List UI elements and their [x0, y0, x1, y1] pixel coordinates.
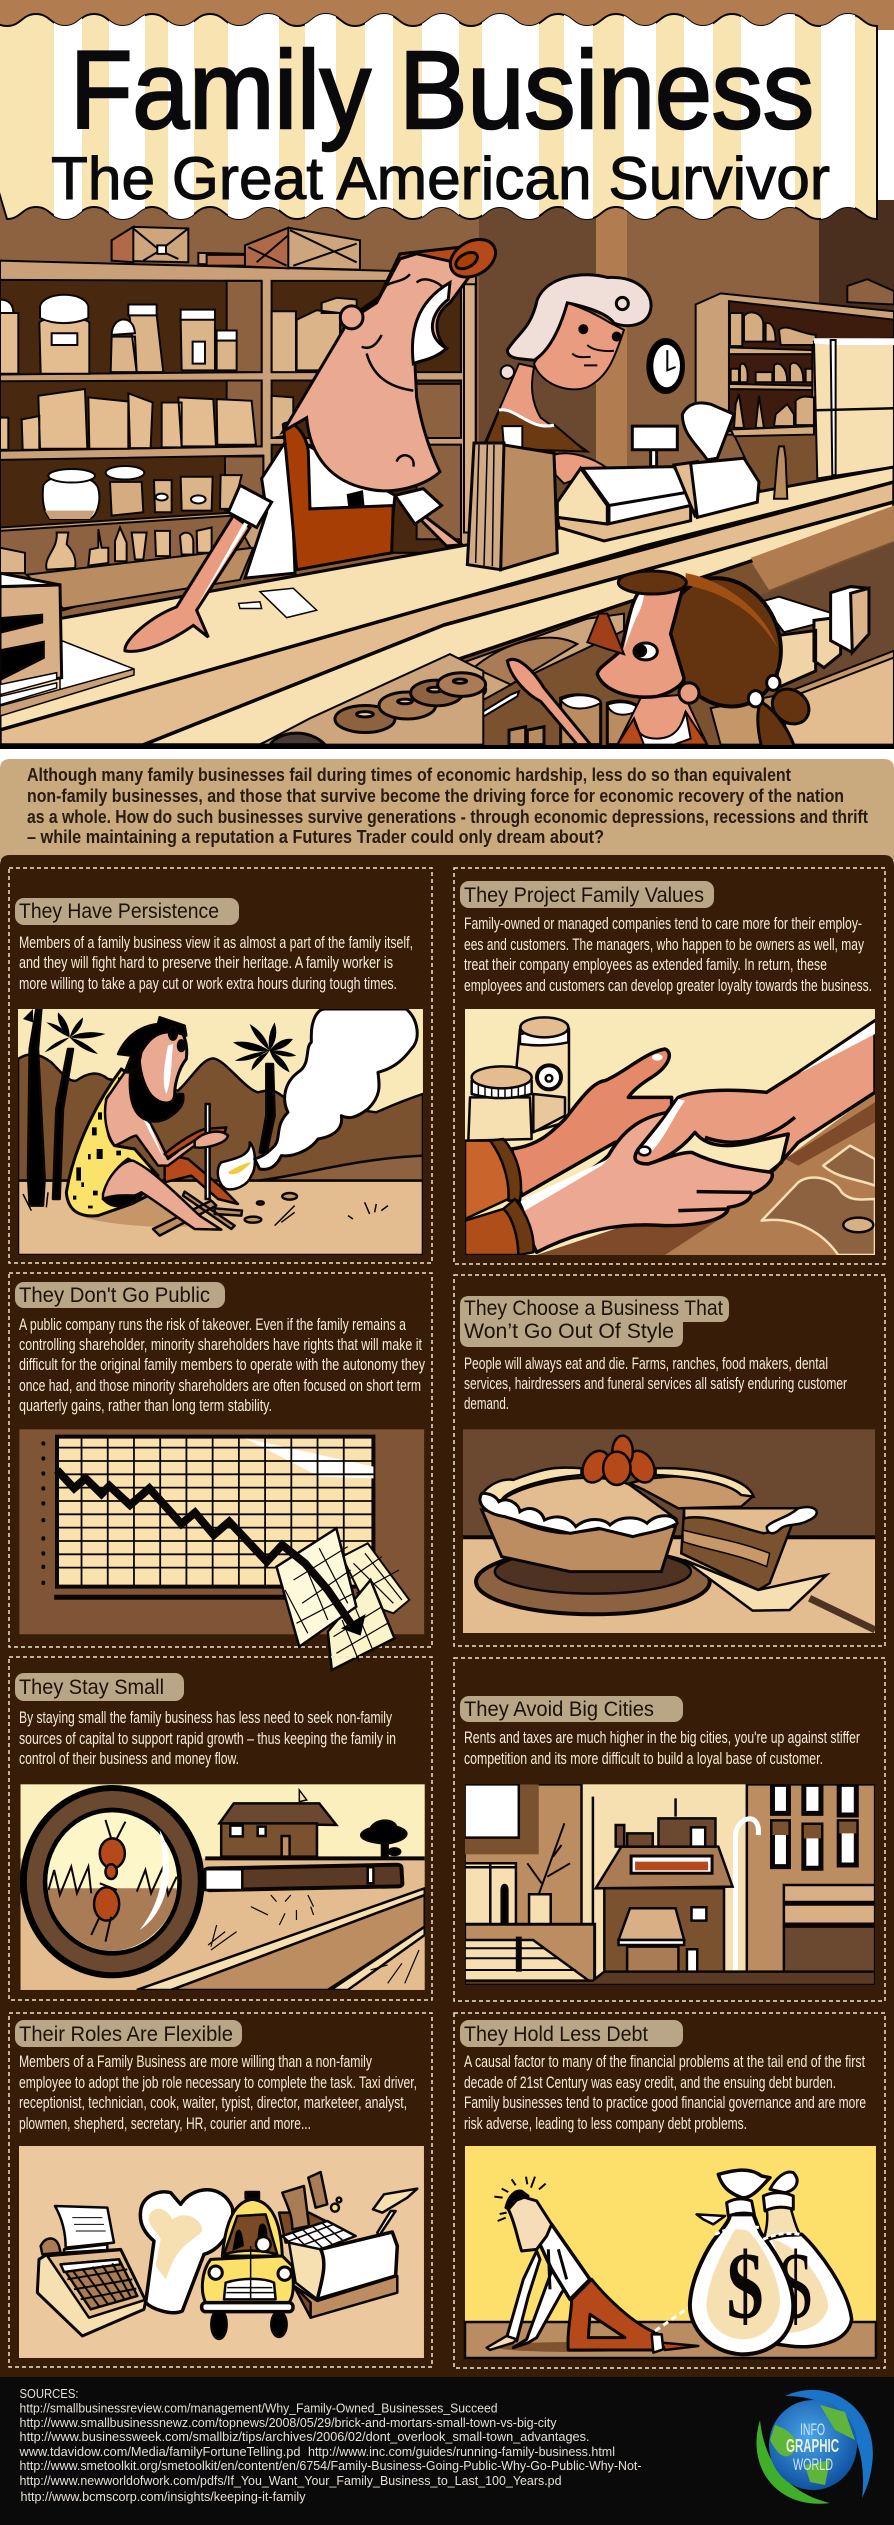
- sources footer: SOURCES:: [20, 2386, 78, 2401]
- illustration: ant under magnifying glass: [20, 1784, 425, 1990]
- sources footer: http://www.businessweek.com/smallbiz/tips/archives/2006/02/dont_overlook_small-town_advantages.: [20, 2429, 590, 2444]
- body text: more willing to take a pay cut or work extra hours during tough times.: [19, 974, 397, 993]
- heading: Their Roles Are Flexible: [19, 2023, 233, 2046]
- heading: They Don't Go Public: [19, 1284, 210, 1307]
- sources footer: www.tdavidow.com/Media/familyFortuneTelling.pd: [19, 2444, 300, 2459]
- illustration: man chained to money bags: [465, 2146, 876, 2358]
- sources footer: http://www.newworldofwork.com/pdfs/If_You_Want_Your_Family_Business_to_Last_100_Years.pd: [20, 2473, 562, 2488]
- body text: [19, 1315, 425, 1415]
- heading: They Stay Small: [19, 1676, 164, 1699]
- body text: [464, 2052, 866, 2133]
- logo: Info Graphic World globe: WORLD: [793, 2455, 833, 2474]
- dark content background: [0, 855, 894, 2377]
- body text: [464, 1354, 847, 1413]
- body text: and they will fight hard to preserve their heritage. A family worker is: [19, 953, 393, 972]
- illustration: cake: [463, 1429, 875, 1635]
- illustration: man chained to money bags: $: [727, 2234, 764, 2339]
- left shelving with jars and boxes: [0, 227, 476, 610]
- logo: Info Graphic World globe: GRAPHIC: [786, 2436, 839, 2456]
- body text: [19, 2052, 417, 2133]
- scene bottom border: [0, 745, 894, 749]
- body text: Members of a Family Business are more willing than a non-family: [19, 2052, 372, 2071]
- body text: sources of capital to support rapid growth – thus keeping the family in: [19, 1729, 396, 1748]
- heading: [460, 1296, 729, 1347]
- body text: controlling shareholder, minority shareholders have rights that will make it: [19, 1335, 422, 1354]
- heading: They Choose a Business That: [464, 1297, 723, 1320]
- sources footer: http://www.smallbusinessnewz.com/topnews/2008/05/29/brick-and-mortars-small-town-vs-big-city: [20, 2415, 557, 2430]
- sources footer: http://www.bcmscorp.com/insights/keeping-it-family: [20, 2489, 306, 2504]
- intro panel: Although many family businesses fail during times of economic hardship, less do so than equivalent: [27, 764, 791, 785]
- body text: Members of a family business view it as almost a part of the family itself,: [19, 933, 413, 952]
- heading: They Have Persistence: [19, 900, 219, 923]
- body text: receptionist, technician, cook, waiter, typist, director, marketeer, analyst,: [19, 2093, 407, 2112]
- panel: They Don't Go Public: [9, 1273, 432, 1670]
- illustration: caveman making fire: [18, 1009, 423, 1255]
- right cabinet, clock, woman, cash registers: [464, 275, 894, 533]
- sources footer: http://www.smetoolkit.org/smetoolkit/en/content/en/6754/Family-Business-Going-Public-Why-Go-Public-Why-Not-: [20, 2458, 642, 2473]
- panel: They Stay Small: [9, 1657, 432, 2000]
- title: Family Business: [70, 29, 814, 152]
- heading: They Project Family Values: [464, 884, 704, 907]
- body text: [19, 1708, 396, 1768]
- body text: control of their business and money flow.: [19, 1749, 239, 1768]
- panel: They Project Family Values: [454, 868, 885, 1264]
- body text: [464, 914, 872, 995]
- intro panel: – while maintaining a reputation a Futures Trader could only dream about?: [27, 826, 604, 847]
- panel: They Choose a Business That Won't Go Out Of Style: [454, 1275, 885, 1646]
- sources footer: [0, 2377, 894, 2525]
- paper bag, registers, girl, donuts: [465, 401, 894, 745]
- sources footer: http://www.inc.com/guides/running-family-business.html: [308, 2444, 615, 2459]
- body text: employee to adopt the job role necessary to complete the task. Taxi driver,: [19, 2073, 417, 2092]
- illustration: typewriter, chef hat, taxi, register: [19, 2146, 424, 2358]
- illustration: small shop among city buildings: [465, 1784, 875, 1985]
- subtitle: The Great American Survivor: [51, 145, 830, 212]
- clock: [647, 339, 684, 393]
- body text: plowmen, shepherd, secretary, HR, courier and more...: [19, 2114, 311, 2133]
- logo: Info Graphic World globe: [756, 2390, 873, 2504]
- logo: Info Graphic World globe: INFO: [800, 2420, 825, 2439]
- body text: risk adverse, leading to less company debt problems.: [464, 2114, 747, 2133]
- illustration: handshake: [465, 1009, 875, 1255]
- panel: They Hold Less Debt: [454, 2013, 885, 2368]
- panel: Their Roles Are Flexible: [9, 2013, 432, 2367]
- body text: quarterly gains, rather than long term stability.: [19, 1396, 272, 1415]
- body text: [19, 933, 413, 993]
- sources footer: http://smallbusinessreview.com/management/Why_Family-Owned_Businesses_Succeed: [20, 2400, 498, 2416]
- crate: [0, 585, 62, 688]
- awning stripes: [0, 14, 877, 219]
- intro panel: [0, 759, 894, 860]
- counter and display case: [0, 467, 894, 745]
- body text: demand.: [464, 1394, 509, 1413]
- body text: [464, 1728, 860, 1768]
- panel: They Have Persistence: [9, 868, 432, 1263]
- body text: difficult for the original family members to operate with the autonomy they: [19, 1355, 425, 1374]
- body text: A public company runs the risk of takeover. Even if the family remains a: [19, 1315, 406, 1334]
- illustration: falling line chart: [19, 1429, 424, 1670]
- heading: They Hold Less Debt: [464, 2023, 648, 2046]
- shop scene illustration: [0, 200, 894, 755]
- illustration: man chained to money bags: $: [778, 2233, 812, 2338]
- heading: They Avoid Big Cities: [464, 1698, 654, 1721]
- heading: Won’t Go Out Of Style: [464, 1320, 674, 1343]
- body text: once had, and those minority shareholders are often focused on short term: [19, 1376, 421, 1395]
- man shopkeeper: [0, 232, 502, 705]
- panel: They Avoid Big Cities: [454, 1658, 885, 2001]
- body text: By staying small the family business has less need to seek non-family: [19, 1708, 392, 1727]
- awning header: [0, 0, 894, 225]
